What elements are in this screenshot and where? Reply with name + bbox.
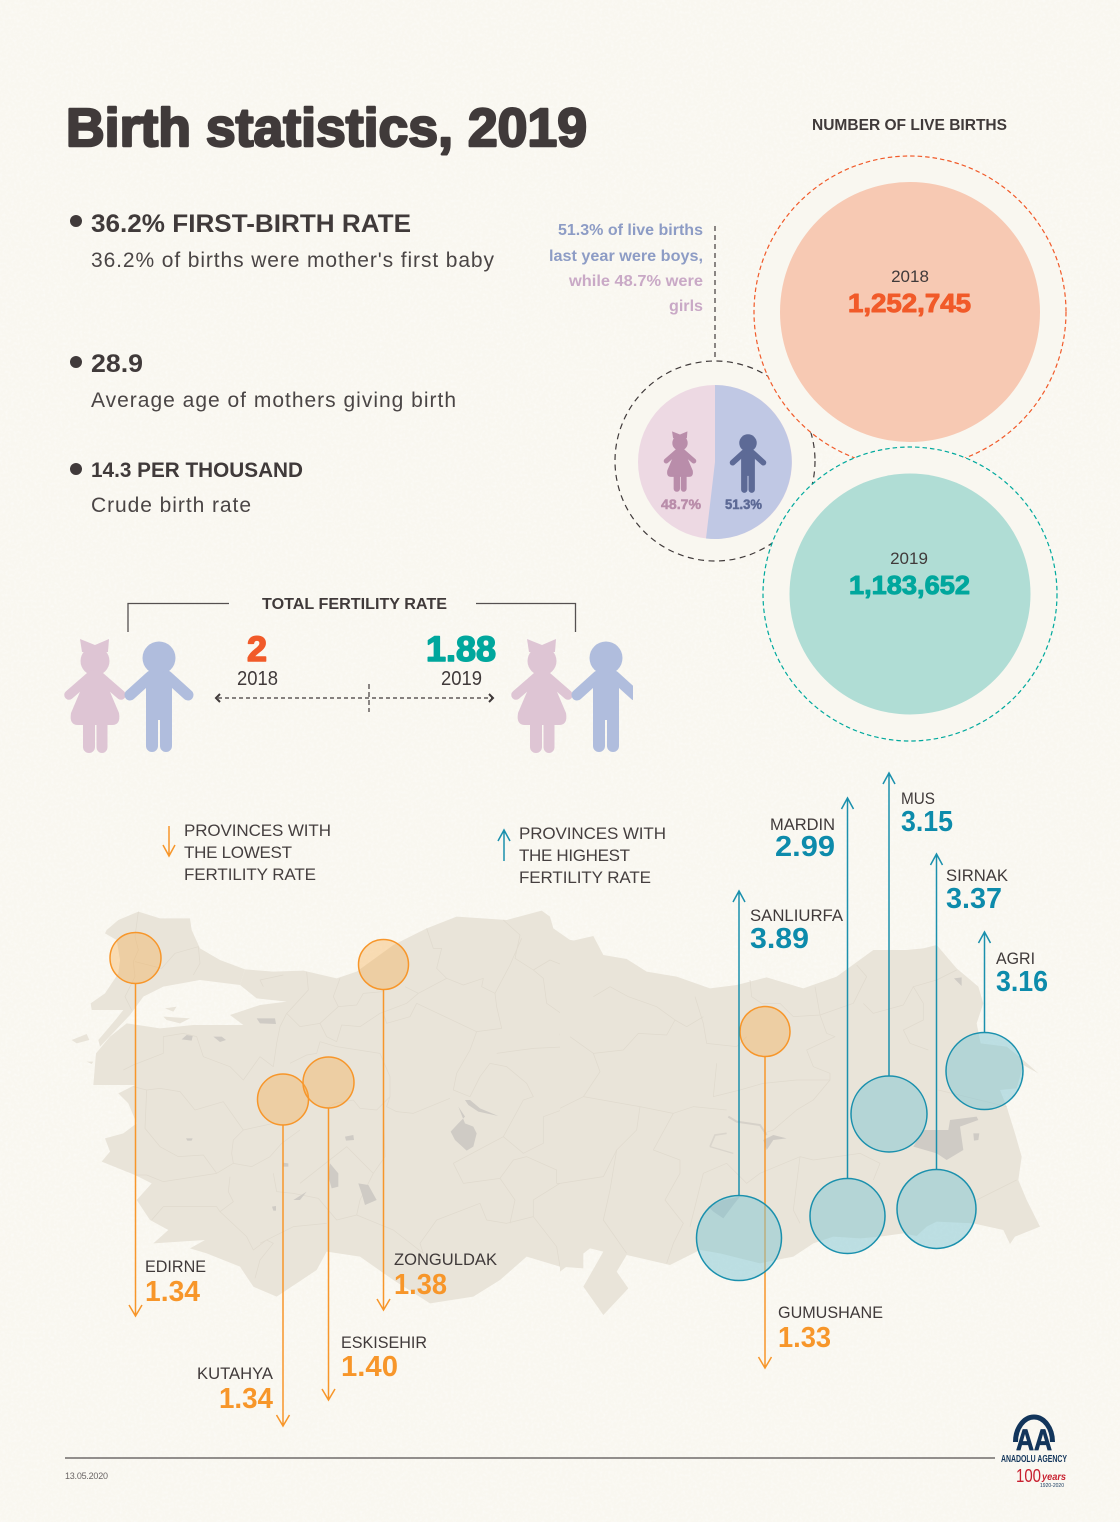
stat: first-birth rate: 36.2% FIRST-BIRTH RATE [91, 210, 411, 238]
logo: Anadolu Agency: years [1041, 1472, 1066, 1483]
dashed ring around pie [615, 361, 815, 561]
marker: Mardin: 2.99 [775, 831, 835, 863]
stat: average age: 28.9 [91, 350, 143, 378]
value: 2018 [237, 630, 278, 690]
icon: boy [733, 434, 763, 493]
logo: Anadolu Agency: AA [1016, 1424, 1052, 1457]
value: 2018: 2 [247, 630, 267, 669]
icon: children 2019 [516, 639, 635, 753]
marker: Mardin [770, 798, 885, 1254]
legend: highest fertility [498, 824, 666, 887]
arrow: 2018 to 2019 [216, 684, 493, 712]
marker: Kutahya: KUTAHYA [197, 1365, 273, 1383]
marker: Gumushane: GUMUSHANE [778, 1304, 883, 1322]
panel: total fertility rate [69, 596, 635, 753]
stat: crude birth rate: 14.3 PER THOUSAND [91, 459, 303, 482]
stat: average age: Average age of mothers giving birth [91, 389, 456, 412]
marker: Mardin: MARDIN [770, 816, 835, 834]
legend: lowest fertility: THE LOWEST [184, 843, 292, 862]
gender note text: 51.3% of live births [558, 222, 703, 239]
icon: girl [666, 431, 694, 492]
date: 13.05.2020 [65, 1471, 108, 1481]
title: Birth statistics, 2019 [66, 98, 587, 158]
legend: highest fertility: PROVINCES WITH [519, 824, 666, 843]
logo: Anadolu Agency: 1920-2020 [1040, 1483, 1064, 1489]
stat: first-birth rate: 36.2% of births were mother's first baby [91, 249, 494, 272]
panel: live births 2019 [763, 447, 1057, 741]
gender note text [549, 222, 703, 315]
marker: Gumushane: 1.33 [778, 1322, 831, 1354]
gender note text: while 48.7% were [568, 273, 703, 290]
label: boys share: 51.3% [725, 496, 763, 512]
panel: live births 2019: 2019 [890, 549, 928, 568]
value: 2019: 1.88 [426, 630, 496, 669]
marker: Mus: 3.15 [901, 806, 953, 838]
marker: Zonguldak [358, 940, 497, 1310]
logo: Anadolu Agency: 100 [1016, 1466, 1041, 1486]
stat: first-birth rate [70, 210, 494, 272]
marker: Eskisehir [303, 1057, 427, 1400]
marker: Sirnak [897, 854, 1008, 1248]
pie chart: boys and girls [638, 385, 792, 539]
panel: live births 2018: 1,252,745 [848, 288, 971, 318]
heading: total fertility rate: TOTAL FERTILITY RATE [262, 596, 447, 613]
logo: Anadolu Agency: ANADOLU AGENCY [1001, 1454, 1067, 1465]
icon: children 2018 [69, 639, 188, 753]
marker: Zonguldak: 1.38 [394, 1269, 447, 1301]
panel: live births 2018: 2018 [891, 267, 929, 286]
marker: Edirne: 1.34 [145, 1276, 200, 1308]
legend: highest fertility: THE HIGHEST [519, 846, 630, 865]
legend: lowest fertility: FERTILITY RATE [184, 865, 316, 884]
marker: Agri: AGRI [996, 950, 1035, 968]
panel: key statistics [70, 210, 494, 517]
legend: lowest fertility: PROVINCES WITH [184, 821, 331, 840]
marker: Agri: 3.16 [996, 966, 1048, 998]
marker: Sirnak: 3.37 [946, 883, 1002, 915]
marker: Zonguldak: ZONGULDAK [394, 1251, 497, 1269]
value: 2019 [426, 630, 496, 690]
heading: number of live births: NUMBER OF LIVE BIRTHS [812, 117, 1007, 134]
marker: Kutahya [197, 1074, 308, 1426]
map of Turkey [72, 911, 1040, 1315]
panel: live births 2018 [754, 156, 1066, 468]
footer [65, 1417, 1067, 1489]
label: girls share: 48.7% [661, 496, 702, 512]
marker: Sanliurfa: 3.89 [750, 923, 809, 955]
marker: Mus [851, 773, 953, 1152]
stat: crude birth rate: Crude birth rate [91, 494, 251, 517]
marker: Kutahya: 1.34 [219, 1383, 273, 1415]
marker: Edirne [110, 932, 206, 1316]
stat: crude birth rate [70, 459, 303, 517]
panel: live births 2019: 1,183,652 [849, 570, 970, 600]
logo: Anadolu Agency [1001, 1417, 1067, 1489]
marker: Sanliurfa [696, 891, 843, 1280]
marker: Eskisehir: 1.40 [341, 1351, 398, 1383]
marker: Agri [946, 932, 1048, 1110]
marker: Mus: MUS [901, 790, 935, 808]
marker: Sirnak: SIRNAK [946, 867, 1008, 885]
marker: Gumushane [740, 1006, 883, 1368]
gender note text: girls [669, 298, 703, 315]
value: 2018: 2018 [237, 668, 278, 690]
marker: Edirne: EDIRNE [145, 1258, 206, 1276]
marker: Eskisehir: ESKISEHIR [341, 1334, 427, 1352]
legend: lowest fertility [163, 821, 331, 884]
marker: Sanliurfa: SANLIURFA [750, 907, 843, 925]
legend: highest fertility: FERTILITY RATE [519, 868, 651, 887]
gender note text: last year were boys, [549, 248, 703, 265]
panel: gender share of births [549, 222, 815, 561]
value: 2019: 2019 [441, 668, 482, 690]
stat: average age [70, 350, 456, 412]
